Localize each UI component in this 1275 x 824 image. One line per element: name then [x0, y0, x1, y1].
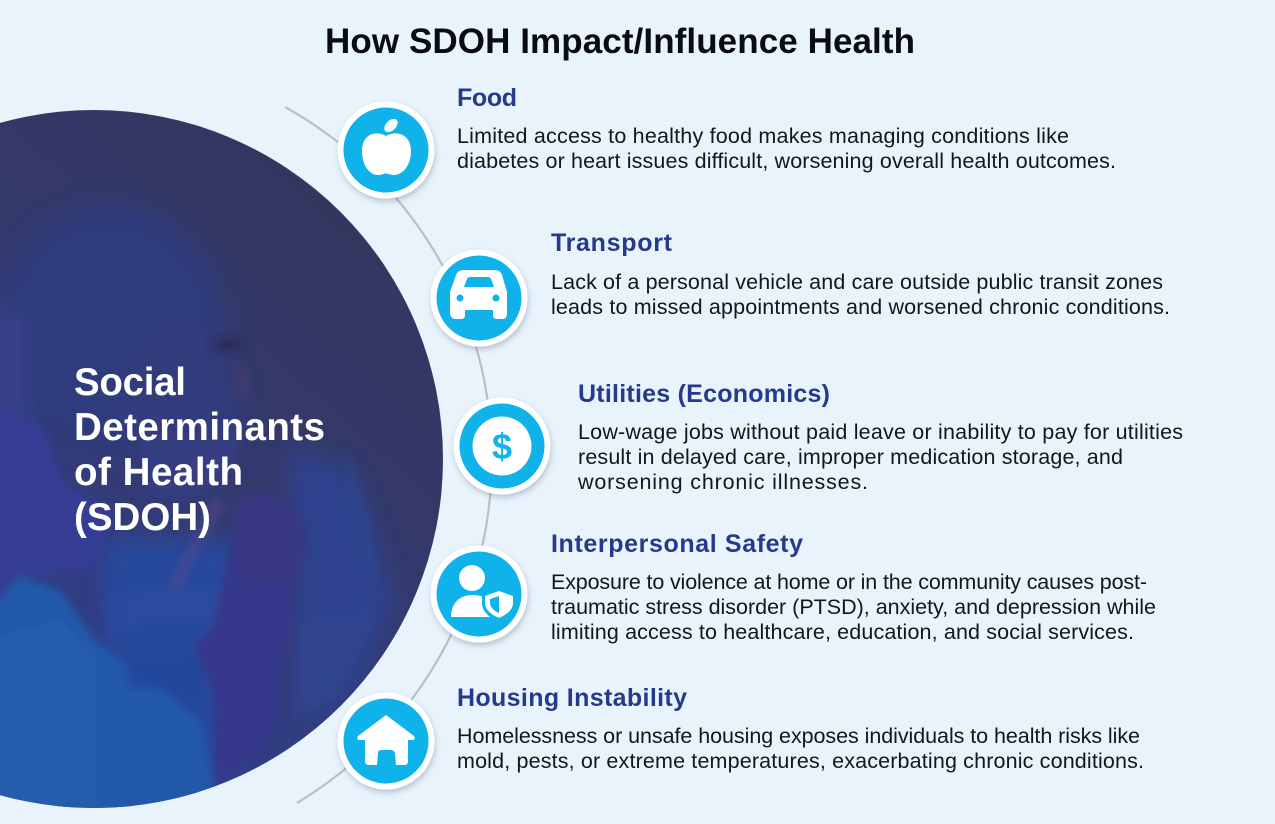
icon: dollar: $ — [492, 426, 512, 467]
text block: Housing Instability: Homelessness or unsafe housing exposes individuals to health risks like — [457, 724, 1140, 748]
heading: Social Determinants of Health: of Health — [74, 451, 243, 494]
text block: Housing Instability — [457, 684, 1144, 773]
text block: Interpersonal Safety — [551, 530, 1156, 644]
text block: Interpersonal Safety: Exposure to violence at home or in the community causes post- — [551, 570, 1147, 594]
text block: Utilities: Low-wage jobs without paid leave or inability to pay for utilities — [578, 420, 1183, 444]
text block: Utilities: Utilities (Economics) — [578, 380, 830, 408]
text block: Transport: leads to missed appointments and worsened chronic conditions. — [551, 295, 1170, 319]
text block: Transport: Transport — [551, 229, 673, 257]
heading: Social Determinants of Health — [74, 361, 325, 539]
text block: Food — [457, 84, 1116, 173]
title: How SDOH Impact/Influence Health — [325, 22, 915, 61]
text block: Food: Food — [457, 84, 517, 112]
icon: car — [430, 250, 528, 346]
icon: person with shield — [430, 546, 528, 642]
text block: Interpersonal Safety: Interpersonal Safety — [551, 530, 803, 558]
icon: apple — [338, 102, 434, 198]
text block: Food: Limited access to healthy food makes managing conditions like — [457, 124, 1069, 148]
icon: dollar — [454, 398, 550, 494]
text block: Utilities — [577, 380, 1183, 494]
heading: Social Determinants of Health: (SDOH) — [74, 496, 211, 539]
text block: Food: diabetes or heart issues difficult, worsening overall health outcomes. — [457, 149, 1116, 173]
panel: photo circle — [0, 110, 443, 815]
text block: Housing Instability: Housing Instability — [457, 684, 687, 712]
icon: house — [338, 692, 434, 790]
heading: Social Determinants of Health: Social — [74, 361, 186, 404]
text block: Interpersonal Safety: traumatic stress disorder (PTSD), anxiety, and depression while — [551, 595, 1156, 619]
text block: Housing Instability: mold, pests, or extreme temperatures, exacerbating chronic conditions. — [457, 749, 1144, 773]
text block: Utilities: worsening chronic illnesses. — [577, 470, 868, 494]
text block: Interpersonal Safety: limiting access to healthcare, education, and social services. — [551, 620, 1134, 644]
text block: Utilities: result in delayed care, improper medication storage, and — [578, 445, 1123, 469]
heading: Social Determinants of Health: Determinants — [74, 406, 325, 449]
connector arc — [285, 107, 492, 803]
text block: Transport: Lack of a personal vehicle and care outside public transit zones — [551, 270, 1163, 294]
text block: Transport — [551, 229, 1170, 319]
